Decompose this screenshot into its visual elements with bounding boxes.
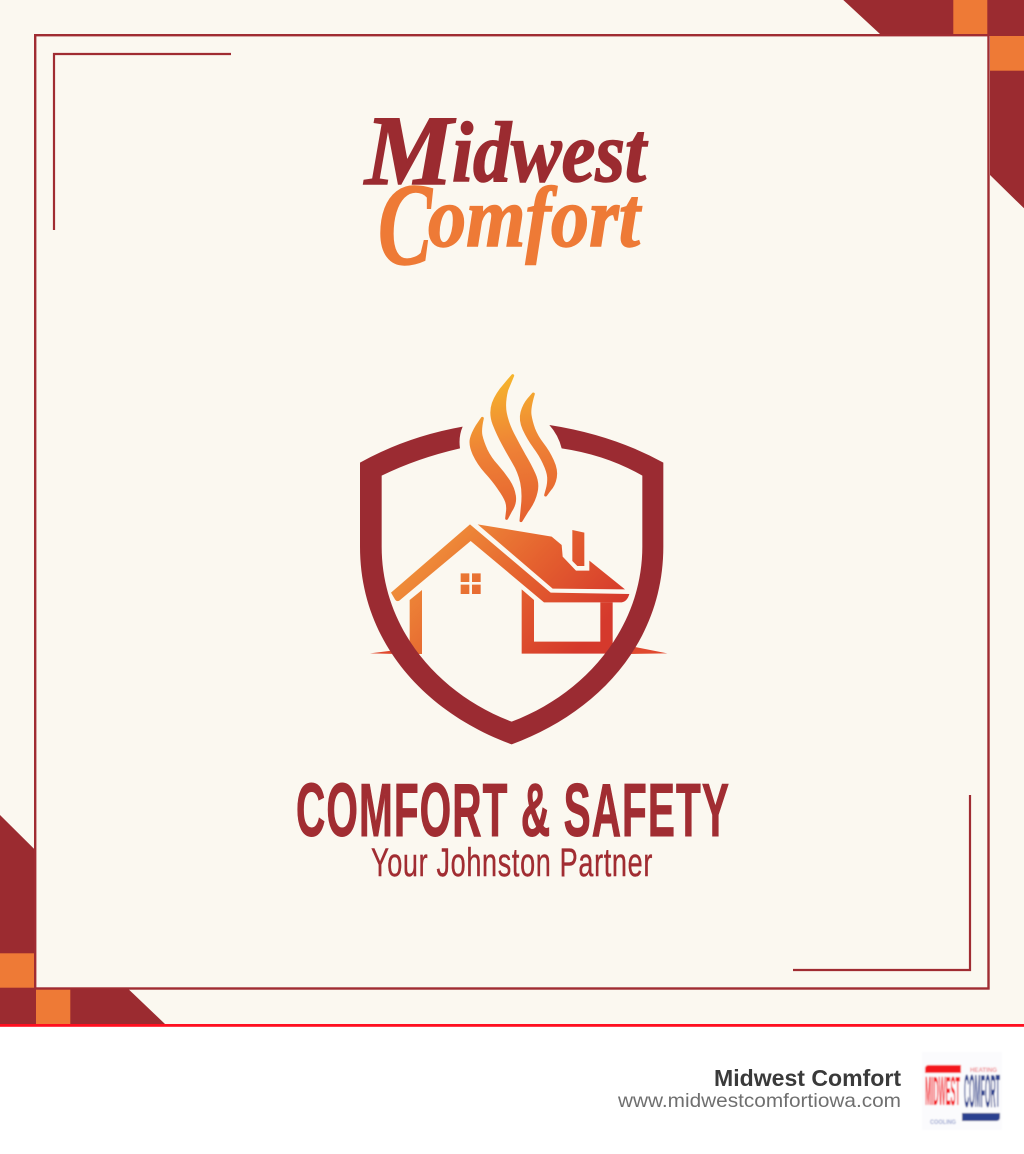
- right wall: [522, 589, 613, 654]
- chimney: [572, 530, 584, 566]
- footer logo: [922, 1052, 1002, 1130]
- footer band: [0, 1024, 1024, 1154]
- footer website: www.midwestcomfortiowa.com: [617, 1090, 901, 1112]
- ground lines: [370, 646, 667, 654]
- footer logo: HEATING: [970, 1068, 997, 1074]
- subheading: Your Johnston Partner: [371, 841, 653, 885]
- footer logo: COOLING: [930, 1120, 956, 1126]
- top right corner decoration: [843, 0, 1024, 208]
- window: [461, 573, 481, 594]
- inner corner line: bottom right: [793, 795, 970, 970]
- roof panel: [478, 524, 625, 589]
- left wall: [410, 590, 422, 654]
- script logo wordmark: [363, 95, 649, 290]
- wordmark: Comfort: C: [378, 159, 433, 290]
- icon: flames: [471, 376, 556, 521]
- roof band: [391, 524, 629, 602]
- wordmark: Midwest: M: [363, 95, 456, 206]
- wordmark: Comfort: omfort: [428, 169, 643, 265]
- emblem: shield, house and flames: [360, 376, 667, 744]
- icon: house: [391, 524, 629, 654]
- footer company name: Midwest Comfort: [714, 1065, 901, 1091]
- icon: shield: [360, 425, 663, 744]
- wordmark: Midwest: idwest: [452, 104, 649, 200]
- outer frame: [35, 35, 988, 988]
- bottom left corner decoration: [0, 815, 165, 1024]
- inner corner line: top left: [54, 54, 231, 230]
